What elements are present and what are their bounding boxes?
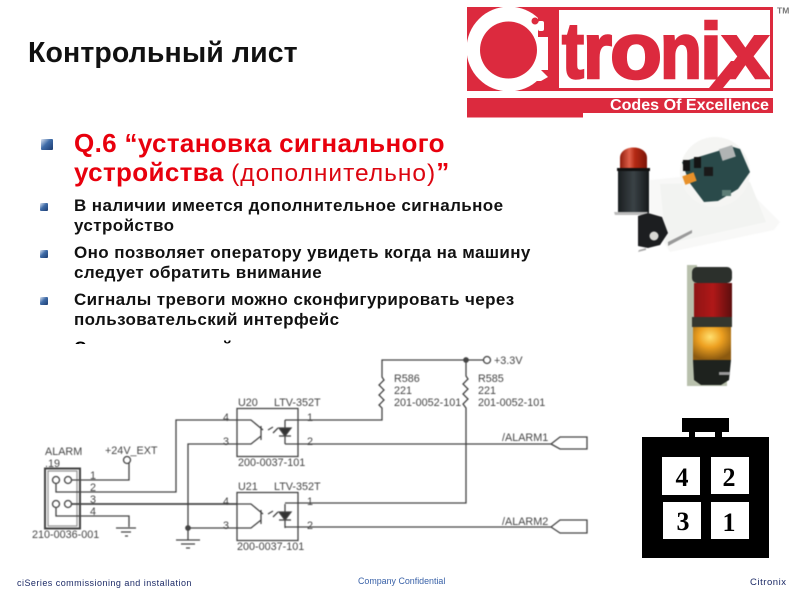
- schematic labels: R586: [394, 373, 420, 385]
- schematic labels: 1: [307, 496, 313, 508]
- schematic labels: [32, 355, 548, 553]
- footer: center: Company Confidential: [358, 576, 445, 586]
- schematic labels: +24V_EXT: [105, 445, 158, 457]
- schematic labels: /ALARM1: [502, 432, 548, 444]
- logo: Citronix: [467, 6, 789, 118]
- schematic labels: ALARM: [45, 446, 82, 458]
- schematic labels: 1: [90, 470, 96, 482]
- connector pinout: 2: [722, 463, 736, 492]
- logo: Citronix: r: [583, 6, 612, 95]
- schematic labels: 201-0052-101: [394, 397, 461, 409]
- heading: question 6: [74, 128, 450, 187]
- schematic labels: 1: [307, 412, 313, 424]
- title: Контрольный лист: [28, 37, 298, 69]
- connector pinout: 3: [676, 507, 690, 536]
- logo: Citronix: i: [700, 6, 722, 95]
- logo: Citronix: x: [722, 6, 769, 95]
- logo: Citronix: t: [562, 6, 584, 95]
- schematic labels: 4: [223, 412, 229, 424]
- optocoupler U20: [237, 408, 298, 456]
- schematic labels: 3: [90, 494, 96, 506]
- text: bullet 3: [74, 290, 515, 329]
- schematic labels: LTV-352T: [274, 397, 321, 409]
- bullet 3: [40, 297, 48, 305]
- schematic labels: 221: [478, 385, 496, 397]
- schematic labels: /ALARM2: [502, 516, 548, 528]
- schematic labels: 2: [307, 520, 313, 532]
- bullet 1: [40, 203, 48, 211]
- schematic labels: 201-0052-101: [478, 397, 545, 409]
- logo: Citronix: TM: [777, 6, 789, 16]
- footer: right: Citronix: [750, 577, 787, 588]
- schematic labels: 4: [90, 506, 96, 518]
- schematic labels: LTV-352T: [274, 481, 321, 493]
- schematic labels: 200-0037-101: [238, 457, 305, 469]
- text: bullet 1: В наличии имеется дополнительное сигнальное: [74, 196, 503, 215]
- text: clipped line behind diagram: [74, 338, 232, 344]
- schematic labels: 210-0036-001: [32, 529, 99, 541]
- logo: Citronix: n: [660, 6, 702, 95]
- schematic labels: 2: [90, 482, 96, 494]
- schematic labels: 4: [223, 496, 229, 508]
- schematic labels: 3: [223, 520, 229, 532]
- text: bullet 2: следует обратить внимание: [74, 263, 322, 282]
- connector pinout: 4: [676, 463, 688, 492]
- connector pinout: 1: [722, 508, 736, 537]
- schematic labels: +3.3V: [494, 355, 523, 367]
- logo: Citronix: Codes Of Excellence: [610, 97, 769, 114]
- connector J19: [45, 468, 80, 528]
- logo: Citronix: o: [610, 6, 662, 95]
- schematic labels: 2: [307, 436, 313, 448]
- text: bullet 3: пользовательский интерфейс: [74, 310, 339, 329]
- text: bullet 3: Сигналы тревоги можно сконфигурировать через: [74, 290, 515, 309]
- text: bullet 2: [74, 243, 531, 282]
- schematic labels: 3: [223, 436, 229, 448]
- schematic labels: 221: [394, 385, 412, 397]
- text: bullet 2: Оно позволяет оператору увидеть когда на машину: [74, 243, 531, 262]
- bullet 2: [40, 250, 48, 258]
- heading: question 6: Q.6 “установка сигнального: [74, 128, 445, 158]
- schematic labels: .19: [45, 458, 60, 470]
- text: bullet 1: [74, 196, 503, 235]
- icon: heading bullet: [41, 139, 53, 150]
- optocoupler U21: [237, 492, 298, 540]
- schematic labels: R585: [478, 373, 504, 385]
- schematic labels: U21: [238, 481, 258, 493]
- text: bullet 1: устройство: [74, 216, 174, 235]
- schematic labels: U20: [238, 397, 258, 409]
- schematic labels: 200-0037-101: [237, 541, 304, 553]
- wiring: [56, 356, 587, 548]
- footer: left: ciSeries commissioning and installation: [17, 578, 192, 588]
- heading: question 6: устройства (дополнительно)”: [74, 157, 450, 187]
